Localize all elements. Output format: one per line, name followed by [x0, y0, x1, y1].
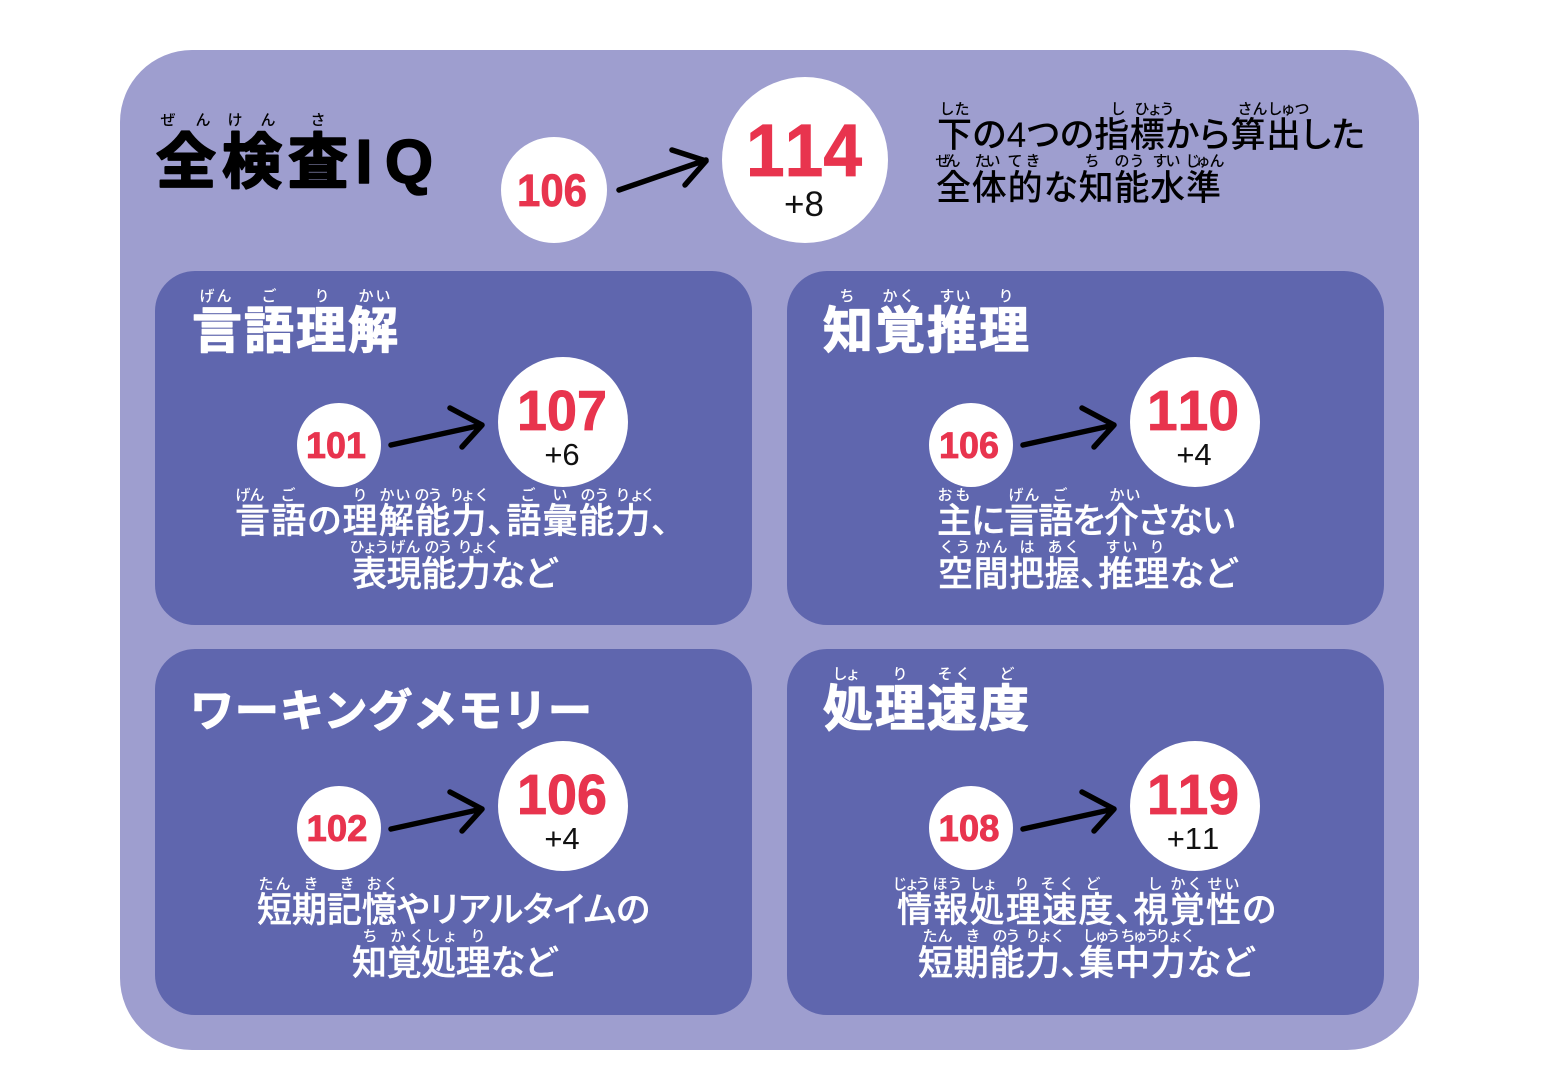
arrow: perceptual [1023, 408, 1114, 447]
score: before 106: 106 [939, 425, 999, 466]
text block: processing speed description: 情報処理速度、視覚性の [897, 891, 1276, 930]
text block: perceptual description: くうかんはあくすいり [939, 539, 1165, 556]
panel: working memory [155, 649, 752, 1015]
score: after 106 +4: 106 [517, 763, 607, 827]
heading: verbal comprehension: 言語理解 [192, 303, 398, 359]
text block: working memory description: ちかくしょり [362, 928, 486, 945]
score: after 106 +4: +4 [544, 821, 580, 856]
text block: processing speed description: じょうほうしょりそくどしかくせい [892, 876, 1240, 893]
text block: working memory description: たんききおく [258, 876, 399, 893]
text block: verbal description: ひょうげんのうりょく [349, 539, 500, 556]
heading: verbal comprehension: げんごりかい [199, 287, 391, 305]
score: after 110 +4: +4 [1176, 437, 1212, 472]
score: before 108 [929, 786, 1013, 870]
text block: verbal description: 表現能力など [352, 555, 559, 594]
text block: processing speed description: たんきのうりょくしゅうちゅうりょく [922, 928, 1196, 945]
heading: full scale IQ: IQ [355, 128, 433, 197]
heading: working memory: ワーキングメモリー [190, 687, 592, 736]
score: before 106 [501, 137, 607, 243]
arrow: verbal [391, 408, 482, 447]
text block: working memory description: 短期記憶やリアルタイムの [257, 891, 650, 930]
text block: processing speed description [892, 876, 1276, 983]
text block: verbal description [235, 486, 669, 594]
score: before 101 [297, 403, 381, 487]
score: after 119 +11: 119 [1147, 763, 1239, 827]
text block: working memory description [257, 876, 650, 983]
panel: processing speed [787, 649, 1384, 1015]
score: after 110 +4: 110 [1147, 379, 1239, 443]
text block: verbal description: げんごりかいのうりょくごいのうりょく [235, 486, 656, 504]
panel: verbal comprehension [155, 271, 752, 625]
score: after 114 +8: +8 [784, 185, 824, 224]
score: after 114 +8 [722, 77, 888, 243]
score: before 101: 101 [306, 425, 366, 466]
heading: full scale IQ [156, 112, 433, 197]
score: after 107 +6: +6 [544, 437, 580, 472]
panel: outer full scale IQ [120, 50, 1419, 1050]
heading: full scale IQ: ぜんけんさ [160, 112, 326, 129]
arrow: working memory [391, 792, 482, 831]
text block: perceptual description: 空間把握、推理など [938, 555, 1239, 594]
heading: full scale IQ: 全検査 [156, 129, 348, 196]
text block: verbal description: 言語の理解能力、語彙能力、 [235, 502, 669, 541]
score: before 106 [929, 403, 1013, 487]
heading: perceptual reasoning: ちかくすいり [839, 288, 1014, 305]
text block: description: 全体的な知能水準 [936, 169, 1221, 208]
score: before 102 [297, 786, 381, 870]
heading: perceptual reasoning: 知覚推理 [823, 303, 1029, 359]
score: before 106: 106 [517, 165, 587, 216]
panel: perceptual reasoning [787, 271, 1384, 625]
heading: processing speed: しょりそくど [832, 666, 1015, 683]
text block: description: したしひょうさんしゅつ [939, 101, 1310, 118]
arrow: processing speed [1023, 792, 1114, 831]
text block: processing speed description: 短期能力、集中力など [918, 944, 1256, 983]
arrow: overall [619, 150, 706, 190]
score: after 107 +6: 107 [517, 379, 607, 443]
score: before 102: 102 [306, 808, 368, 849]
text block: perceptual description [937, 486, 1239, 594]
score: after 107 +6 [498, 357, 628, 487]
score: after 114 +8: 114 [746, 109, 862, 192]
score: before 108: 108 [938, 808, 1000, 849]
score: after 119 +11 [1130, 741, 1260, 871]
score: after 119 +11: +11 [1167, 821, 1219, 856]
text block: perceptual description: おもげんごかい [937, 486, 1141, 504]
text block: description: ぜんたいてきちのうすいじゅん [935, 153, 1225, 170]
text block: description [935, 101, 1365, 208]
score: after 106 +4 [498, 741, 628, 871]
text block: perceptual description: 主に言語を介さない [937, 502, 1235, 541]
text block: working memory description: 知覚処理など [352, 944, 559, 983]
heading: processing speed: 処理速度 [823, 681, 1029, 737]
text block: description: 下の4つの指標から算出した [937, 116, 1365, 155]
score: after 110 +4 [1130, 357, 1260, 487]
